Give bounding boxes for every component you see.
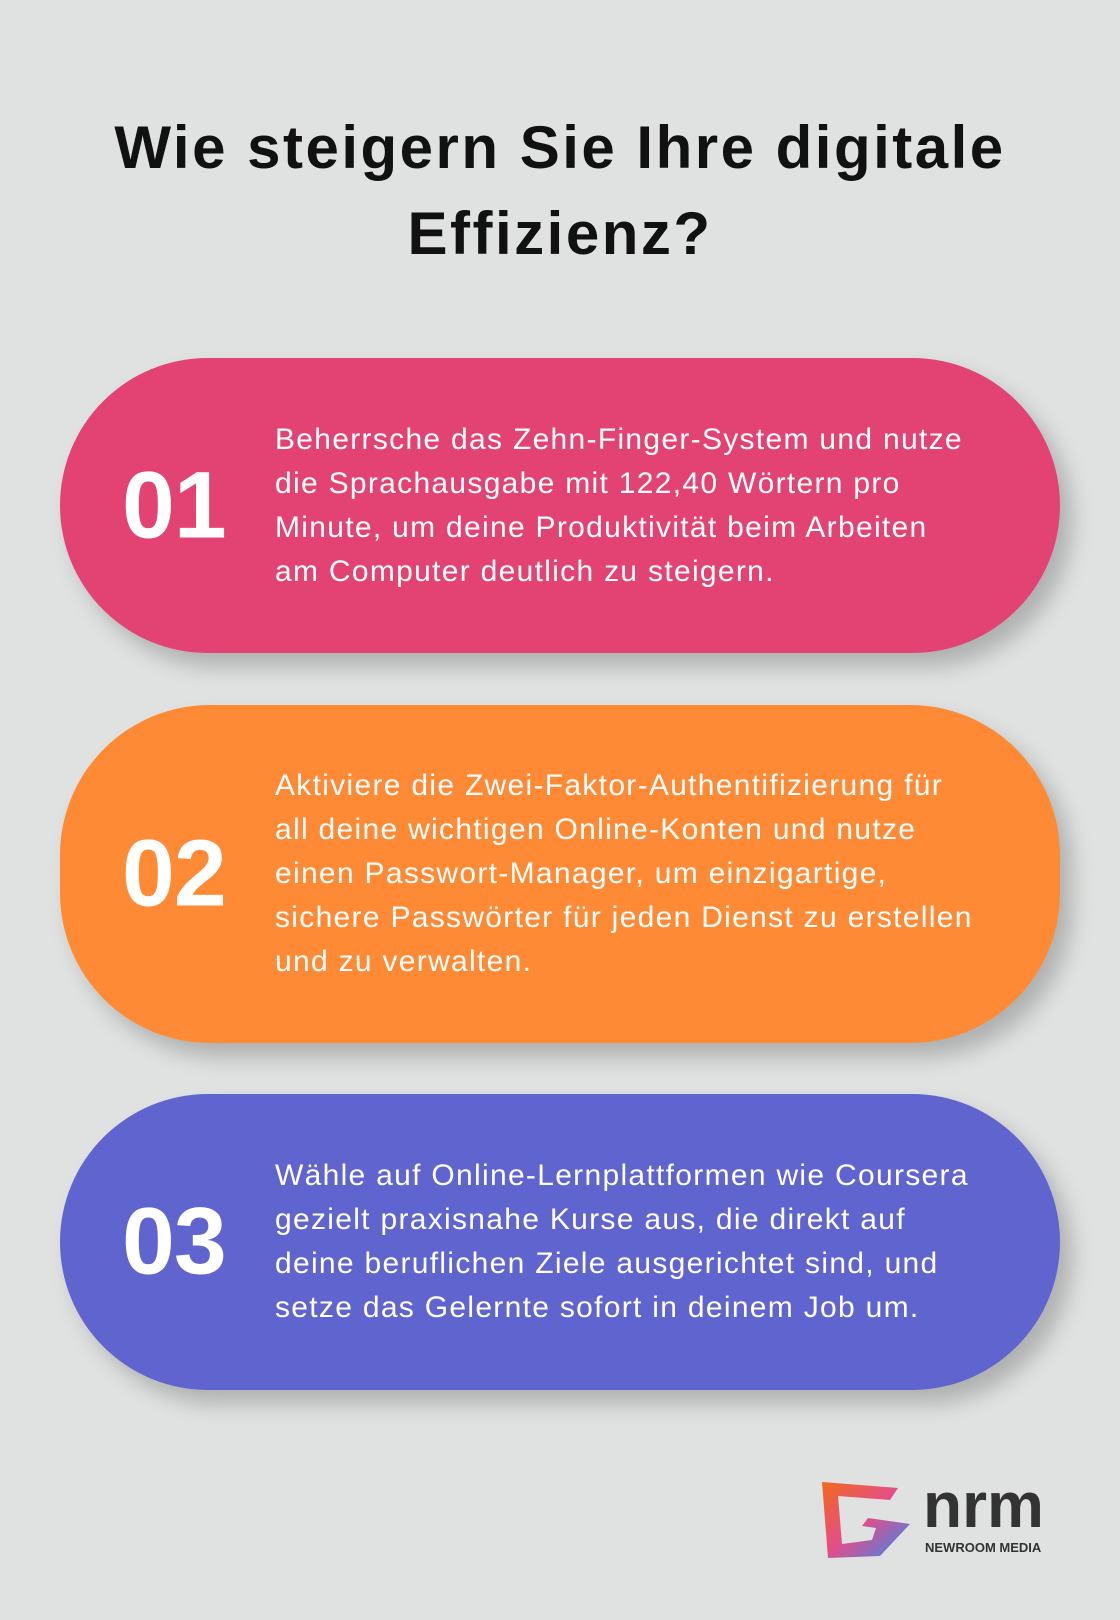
text 01: die Sprachausgabe mit 122,40 Wörtern pro [275, 466, 901, 500]
title: Wie steigern Sie Ihre digitale [114, 114, 1006, 181]
text 02: und zu verwalten. [275, 945, 532, 978]
text 02: all deine wichtigen Online-Konten und nutze [275, 813, 916, 846]
logo text nrm: nrm [923, 1469, 1044, 1541]
icon: logo mark [822, 1482, 910, 1558]
number 01: 01 [122, 452, 226, 558]
text 03: gezielt praxisnahe Kurse aus, die direkt auf [275, 1203, 906, 1236]
panel: step 02 [60, 705, 1060, 1043]
number 02: 02 [122, 820, 226, 926]
logo [822, 1469, 1044, 1558]
title: Effizienz? [408, 200, 712, 267]
logo subtitle: NEWROOM MEDIA [925, 1540, 1041, 1555]
text 02 [275, 769, 973, 978]
text 03 [275, 1159, 969, 1324]
text 01: Beherrsche das Zehn-Finger-System und nutze [275, 422, 963, 456]
panel: step 01 [60, 358, 1060, 653]
text 03: setze das Gelernte sofort in deinem Job um. [275, 1291, 920, 1324]
text 01: Minute, um deine Produktivität beim Arbeiten [275, 510, 928, 544]
text 01 [275, 422, 963, 588]
number 03: 03 [122, 1188, 226, 1294]
text 02: Aktiviere die Zwei-Faktor-Authentifizierung für [275, 769, 943, 802]
panel: step 03 [60, 1094, 1060, 1390]
text 01: am Computer deutlich zu steigern. [275, 554, 775, 588]
text 03: deine beruflichen Ziele ausgerichtet sind, und [275, 1247, 939, 1280]
text 02: einen Passwort-Manager, um einzigartige, [275, 857, 887, 890]
text 02: sichere Passwörter für jeden Dienst zu erstellen [275, 901, 973, 934]
title [114, 114, 1006, 267]
text 03: Wähle auf Online-Lernplattformen wie Coursera [275, 1159, 969, 1192]
